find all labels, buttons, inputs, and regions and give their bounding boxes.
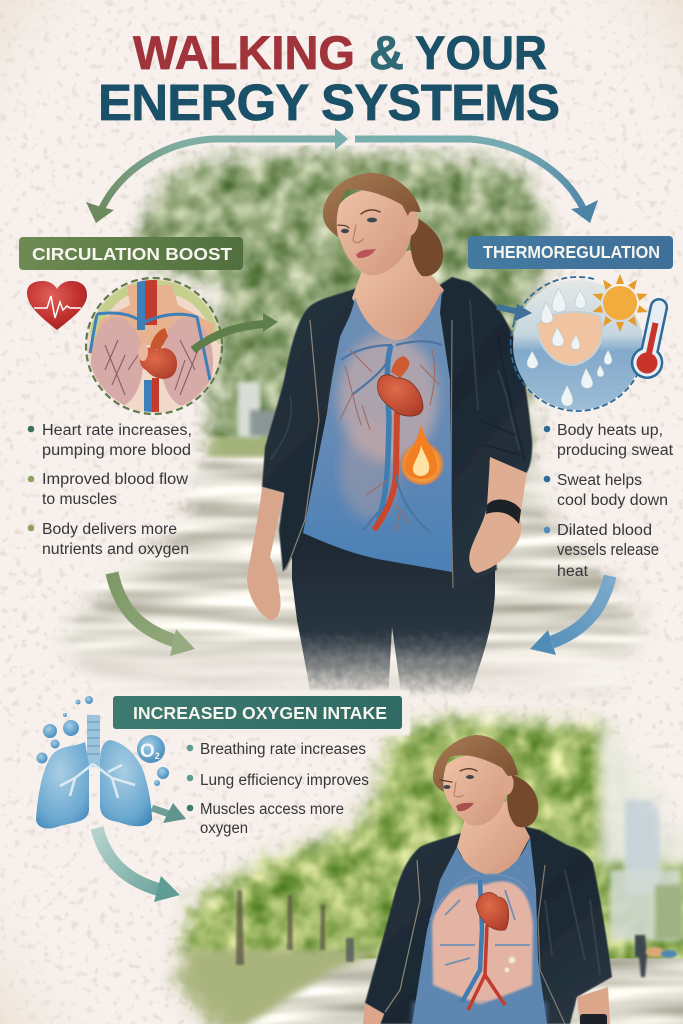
title: ENERGY SYSTEMS [98, 74, 560, 131]
arrow: top arc to circulation [86, 128, 348, 223]
icon: sun [591, 274, 649, 332]
arrow: oxygen down [97, 828, 180, 902]
icon: thermometer [629, 296, 675, 380]
bullet list: circulation: Body delivers more [42, 521, 177, 538]
pants [292, 525, 495, 700]
bullet list: circulation [28, 422, 192, 558]
arrow: top arc to thermoregulation [355, 139, 598, 223]
arrow: thermoregulation down [530, 576, 610, 655]
icon: lungs with oxygen bubbles: 2 [155, 751, 160, 761]
icon: lungs with oxygen bubbles: O [140, 741, 155, 762]
paper halo behind heading [105, 690, 410, 735]
ear and earring [407, 211, 418, 236]
bullet list: oxygen: Breathing rate increases [200, 741, 366, 758]
chest anatomy overlay [412, 874, 547, 1024]
panel: thermoregulation [468, 236, 675, 655]
smartwatch [580, 1014, 607, 1024]
bullet list: thermoregulation: producing sweat [557, 442, 674, 459]
heart on shirt [378, 356, 423, 416]
arrow: circulation to body [193, 313, 278, 350]
bullet list: circulation: to muscles [42, 491, 117, 508]
bullet list: thermoregulation: heat [557, 563, 589, 580]
bullet list: oxygen: Lung efficiency improves [200, 772, 369, 789]
woman walking, main figure [247, 173, 532, 700]
bullet list: thermoregulation: cool body down [557, 492, 668, 509]
bullet list: circulation: nutrients and oxygen [42, 541, 189, 558]
neck and chest [352, 250, 444, 345]
heart on shirt [476, 892, 509, 930]
hair [433, 735, 518, 792]
head [336, 189, 413, 275]
icon: lungs with oxygen bubbles [36, 696, 169, 828]
title: & [369, 26, 404, 79]
face features [440, 769, 477, 811]
hoodie [262, 277, 532, 590]
bullet list: circulation: Improved blood flow [42, 471, 189, 488]
bullet list: circulation: Heart rate increases, [42, 422, 192, 439]
bullet list: oxygen [187, 741, 369, 837]
bullet list: thermoregulation: vessels release [557, 541, 659, 559]
chest anatomy overlay [338, 334, 442, 535]
hoodie [365, 826, 612, 1024]
bullet list: oxygen: oxygen [200, 820, 248, 837]
shirt [412, 837, 547, 1024]
right arm and hand [469, 457, 527, 573]
circular illustration: sweat on skin [511, 277, 643, 411]
title [98, 26, 560, 131]
arrow: body to thermoregulation [497, 304, 532, 322]
flame on shirt [399, 424, 445, 485]
woman walking, lower figure [363, 735, 612, 1024]
circular illustration: heart and lungs [85, 278, 225, 418]
left arm and hand [247, 487, 284, 620]
lower park scene photo backdrop [150, 705, 683, 1024]
upper park scene photo backdrop [50, 145, 660, 712]
hoodie zip and folds [385, 860, 600, 1024]
ear [503, 774, 514, 795]
panel: increased oxygen intake [36, 690, 410, 902]
title: WALKING [133, 26, 355, 79]
heading: thermoregulation: THERMOREGULATION [483, 242, 660, 262]
heading: circulation boost [19, 237, 243, 270]
heading: increased oxygen intake: INCREASED OXYGEN INTAKE [133, 703, 387, 723]
heading: thermoregulation [468, 236, 673, 269]
forearms [363, 987, 610, 1024]
heading: increased oxygen intake [113, 696, 402, 729]
heading: circulation boost: CIRCULATION BOOST [32, 244, 232, 264]
panel: circulation boost [19, 237, 278, 656]
arrow: lungs to text [152, 803, 186, 823]
arrow: circulation down [112, 573, 195, 656]
hair [323, 173, 421, 237]
shirt [303, 290, 452, 572]
smartwatch [486, 500, 521, 524]
neck and chest [457, 800, 530, 878]
title: YOUR [415, 26, 547, 79]
face features [338, 210, 380, 258]
bullet list: oxygen: Muscles access more [200, 801, 344, 818]
bullet list: thermoregulation: Dilated blood [557, 522, 652, 539]
bullet list: thermoregulation: Body heats up, [557, 422, 663, 439]
bullet list: thermoregulation [544, 422, 674, 580]
ponytail [507, 775, 538, 827]
head [443, 755, 507, 826]
hoodie folds and zipper [270, 300, 525, 588]
bullet list: circulation: pumping more blood [42, 442, 191, 459]
bullet list: thermoregulation: Sweat helps [557, 472, 642, 489]
ponytail [410, 215, 443, 276]
icon: heart with pulse [27, 281, 87, 330]
